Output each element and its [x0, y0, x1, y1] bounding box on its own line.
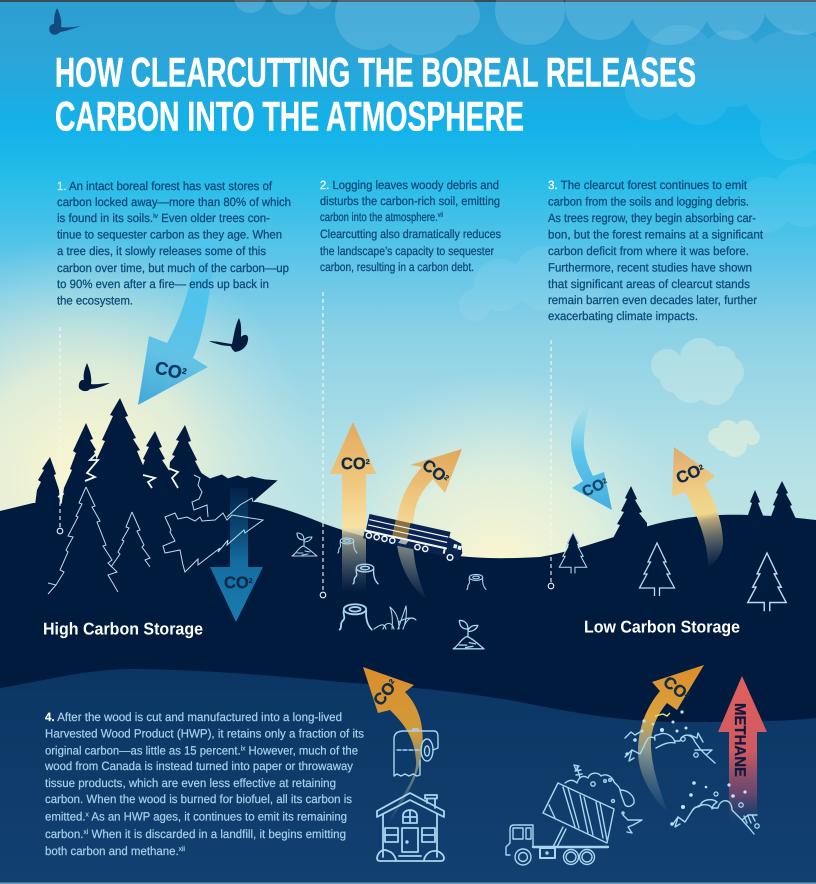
- text block 2: carbon into the atmosphere.: [320, 210, 469, 224]
- text block 2: disturbs the carbon-rich soil, emitting: [320, 194, 500, 208]
- text block 1: carbon over time, but much of the carbon—up: [57, 261, 289, 275]
- text block 4: However, much of the: [245, 744, 358, 758]
- icon: bird left: [79, 363, 110, 391]
- arrow: CO2 curved up: [396, 449, 462, 600]
- CO2 label: CO: [580, 476, 607, 501]
- text block 4: xi: [83, 828, 89, 836]
- text block 3: bon, but the forest remains at a significant: [548, 228, 764, 242]
- icon: bird centre: [209, 318, 248, 352]
- title: [55, 48, 696, 140]
- text block 2: Clearcutting also dramatically reduces: [320, 227, 501, 241]
- text block 1: to 90% even after a fire— ends up back in: [57, 277, 269, 291]
- text block 4: 4. After the wood is cut and manufactured into a long-lived: [45, 710, 342, 724]
- arrow: CO2 from wood products: [363, 667, 423, 825]
- text block 2: [320, 178, 501, 274]
- text block 4: When it is discarded in a landfill, it begins emitting: [88, 827, 346, 841]
- arrow: CO2 from landfill: [638, 665, 704, 813]
- text block 1: Even older trees con-: [158, 211, 270, 225]
- text block 2: 2. Logging leaves woody debris and: [320, 178, 499, 192]
- text block 4: carbon. When the wood is burned for biofuel, all its carbon is: [45, 792, 352, 806]
- text block 3: remain barren even decades later, further: [548, 293, 757, 307]
- regrowth silhouette trees: [563, 481, 796, 558]
- CO2 label: 2: [181, 366, 188, 376]
- CO2 label: 2: [388, 678, 396, 686]
- dotted leader lines: [57, 292, 554, 598]
- felled tree outline: [163, 475, 263, 572]
- text block 4: xii: [179, 845, 185, 853]
- text block 2: carbon, resulting in a carbon debt.: [320, 260, 474, 274]
- CO2 label: CO: [419, 456, 449, 485]
- text block 4: wood from Canada is instead turned into paper or throwaway: [44, 759, 353, 773]
- text block 4: original carbon—as little as 15 percent.: [45, 744, 252, 758]
- felled tree silhouette: [195, 473, 278, 520]
- icon: stump 2: [353, 564, 378, 584]
- lower panel: [0, 669, 816, 884]
- CO2 label: 2: [698, 464, 705, 472]
- icon: stump 1: [338, 538, 357, 553]
- icon: landfill upper: [625, 710, 715, 763]
- text block 4: emitted.: [45, 810, 88, 824]
- text block 3: As trees regrow, they begin absorbing car-: [548, 211, 756, 225]
- text block 4: Harvested Wood Product (HWP), it retains only a fraction of its: [45, 726, 364, 740]
- text block 3: 3. The clearcut forest continues to emit: [548, 178, 748, 192]
- icon: stump 3: [340, 604, 372, 630]
- arrow: CO2 down into regrowth: [571, 403, 612, 510]
- title: CARBON INTO THE ATMOSPHERE: [55, 92, 524, 140]
- icon: logging truck: [363, 514, 466, 563]
- icon: seedling left: [292, 533, 317, 556]
- text block 4: tissue products, which are even less effective at retaining: [45, 776, 336, 790]
- tree outlines: [48, 487, 150, 594]
- forest silhouette trees: [35, 398, 210, 520]
- CO2 label: 2: [442, 474, 450, 482]
- icon: toilet paper roll: [394, 729, 438, 776]
- arrow: methane: [718, 676, 767, 825]
- label: low carbon storage: Low Carbon Storage: [584, 618, 740, 636]
- text block 1: iv: [153, 212, 158, 220]
- icon: landfill lower: [670, 781, 759, 834]
- icon: grass: [374, 606, 416, 629]
- icon: house: [377, 793, 444, 861]
- text block 3: exacerbating climate impacts.: [548, 309, 698, 323]
- text block 4: x: [86, 812, 89, 818]
- text block 4: carbon.: [45, 827, 85, 841]
- icon: stump 4: [467, 574, 486, 590]
- text block 2: the landscape’s capacity to sequester: [320, 244, 494, 258]
- sky background: [0, 0, 816, 640]
- text block 3: carbon deficit from where it was before.: [548, 244, 749, 258]
- clouds: [234, 0, 816, 457]
- text block 4: both carbon and methane.: [45, 844, 185, 858]
- forest highlights: [58, 452, 178, 497]
- text block 3: Furthermore, recent studies have shown: [548, 260, 752, 274]
- CO2 label: 2: [249, 578, 253, 585]
- CO2 label: CO: [341, 455, 366, 473]
- icon: bird top left: [49, 8, 81, 35]
- text block 3: that significant areas of clearcut stands: [548, 277, 750, 291]
- CO2 label: CO: [224, 574, 249, 592]
- text block 2: vii: [438, 211, 443, 219]
- CO2 label: 2: [366, 459, 370, 466]
- text block 4: [44, 710, 364, 858]
- text block 1: the ecosystem.: [57, 294, 133, 308]
- text block 1: tinue to sequester carbon as they age. When: [57, 228, 282, 242]
- ground: [0, 502, 816, 884]
- text block 3: carbon from the soils and logging debris.: [548, 194, 749, 208]
- young tree outlines: [559, 532, 786, 611]
- CO2 label: CO: [153, 357, 184, 383]
- text block 1: is found in its soils.: [57, 211, 158, 225]
- icon: seedling right: [453, 620, 484, 649]
- text block 4: As an HWP ages, it continues to emit its remaining: [89, 810, 347, 824]
- CO2 label: CO: [660, 673, 690, 702]
- icon: dump truck: [506, 765, 642, 865]
- CO2 label: 2: [602, 478, 608, 486]
- arrow: carbon absorbed into forest: [138, 172, 330, 405]
- text block 1: [57, 179, 291, 308]
- arrow: carbon going into soil: [210, 488, 263, 622]
- text block 4: ix: [241, 744, 246, 752]
- text block 1: a tree dies, it slowly releases some of this: [57, 244, 266, 258]
- label: high carbon storage: High Carbon Storage: [43, 620, 203, 638]
- methane label: METHANE: [731, 703, 748, 777]
- CO2 label: 2: [683, 691, 691, 699]
- arrow: CO2 rising from regrowth: [672, 447, 723, 567]
- arrow: CO2 up from soil: [330, 422, 376, 592]
- CO2 label: CO: [370, 679, 399, 709]
- text block 3: [548, 178, 764, 323]
- text block 1: 1. An intact boreal forest has vast stores of: [57, 179, 273, 193]
- text block 1: carbon locked away—more than 80% of which: [57, 195, 291, 209]
- CO2 label: CO: [674, 462, 703, 488]
